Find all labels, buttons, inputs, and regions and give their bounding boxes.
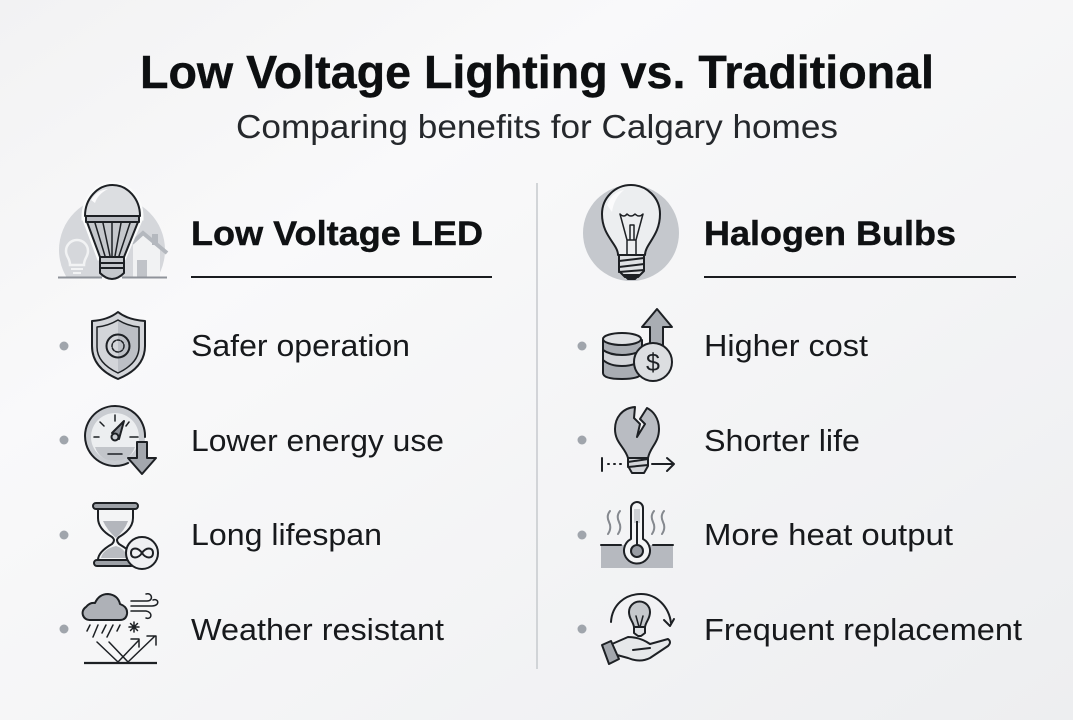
item: Shorter life xyxy=(578,407,860,473)
item: Lower energy use xyxy=(60,406,444,474)
item: Lower energy use: Lower energy use xyxy=(191,423,444,458)
heading: Low Voltage LED: Low Voltage LED xyxy=(191,215,483,253)
panel: Low Voltage LED xyxy=(58,185,492,663)
icon: hourglass with infinity xyxy=(93,503,158,569)
icon: cracked bulb xyxy=(602,407,674,473)
icon: LED bulb and house xyxy=(58,184,168,280)
item: Frequent replacement xyxy=(578,594,1022,664)
icon: halogen bulb xyxy=(583,185,679,281)
item: Weather resistant xyxy=(60,594,444,663)
item: Frequent replacement: Frequent replacement xyxy=(704,612,1022,647)
icon: shield xyxy=(92,312,145,379)
icon: thermometer heat xyxy=(601,502,673,568)
icon: weather xyxy=(83,594,158,663)
item: More heat output xyxy=(578,502,953,568)
icon: gauge with down arrow xyxy=(85,406,156,474)
item: Long lifespan xyxy=(60,503,382,569)
item: More heat output: More heat output xyxy=(704,517,953,552)
title: Low Voltage Lighting vs. Traditional xyxy=(140,46,934,98)
panel: Halogen Bulbs xyxy=(578,185,1022,664)
icon: coins with up arrow xyxy=(603,309,672,381)
center divider xyxy=(536,183,538,669)
item: Safer operation: Safer operation xyxy=(191,328,410,363)
subtitle: Comparing benefits for Calgary homes xyxy=(236,108,838,145)
item: Safer operation xyxy=(60,312,410,379)
item: Higher cost xyxy=(578,309,868,381)
heading: Halogen Bulbs: Halogen Bulbs xyxy=(704,215,956,253)
item: Weather resistant: Weather resistant xyxy=(191,612,444,647)
item: Higher cost: Higher cost xyxy=(704,328,868,363)
icon: hand with bulb xyxy=(602,594,674,664)
item: Shorter life: Shorter life xyxy=(704,423,860,458)
item: Long lifespan: Long lifespan xyxy=(191,517,382,552)
icon: coins with up arrow: $ xyxy=(646,349,660,377)
